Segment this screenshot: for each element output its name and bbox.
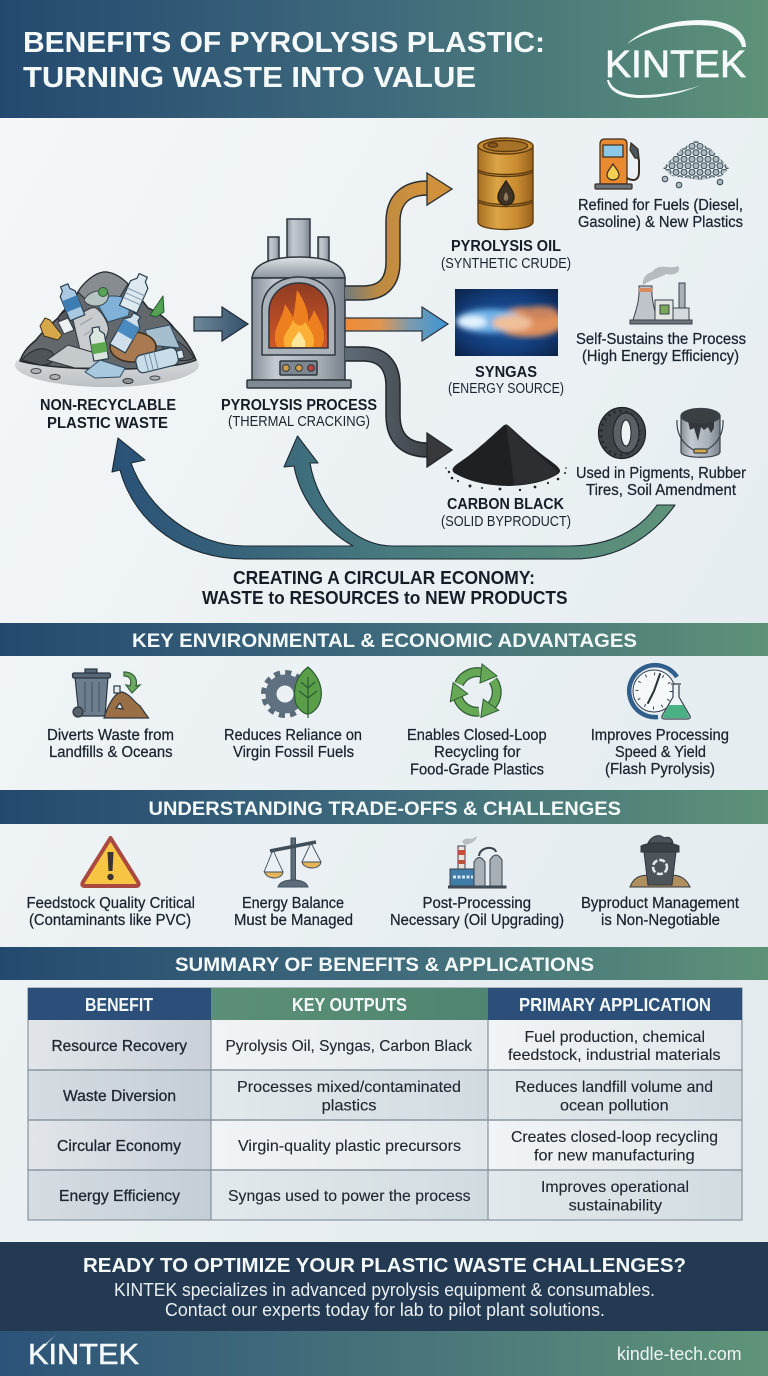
logo: KINTEK: KINTEK: [605, 44, 746, 86]
title: TURNING WASTE INTO VALUE: [23, 62, 476, 94]
table row: waste diversion: Reduces landfill volume and: [515, 1079, 713, 1096]
table row: waste diversion: Processes mixed/contaminated: [237, 1079, 461, 1096]
title: BENEFITS OF PYROLYSIS PLASTIC:: [23, 27, 545, 59]
table row: waste diversion: plastics: [322, 1098, 376, 1114]
label: syngas: SYNGAS: [475, 364, 537, 381]
text: closed-loop recycling: [407, 727, 547, 778]
table row: circular economy: Circular Economy: [57, 1138, 181, 1155]
footer band: [0, 1331, 768, 1376]
icon: tire: [598, 408, 646, 458]
footer url: kindle-tech.com: [617, 1344, 742, 1364]
arrow: circular return loop: [112, 436, 675, 559]
icon: clock and flask: [629, 665, 690, 719]
text: syngas application: Self-Sustains the Process: [576, 331, 746, 348]
text: post-processing: [390, 895, 564, 929]
label: pyrolysis oil: (SYNTHETIC CRUDE): [441, 255, 571, 272]
table row: resource recovery: Pyrolysis Oil, Syngas, Carbon Black: [226, 1038, 473, 1055]
heading band: trade-offs: [0, 790, 768, 824]
text: oil applications: Refined for Fuels (Diesel,: [578, 197, 743, 214]
header band: [0, 0, 768, 118]
table row: energy efficiency: sustainability: [569, 1198, 662, 1214]
arrow: to carbon black: [345, 354, 452, 467]
text: diverts waste: Landfills & Oceans: [49, 744, 173, 761]
text: reduces reliance: [224, 727, 362, 761]
logo: KINTEK: [605, 20, 746, 98]
label: carbon black: [441, 496, 571, 530]
arrow: to pyrolysis oil: [345, 173, 452, 293]
image: syngas flame: [455, 289, 564, 356]
text: feedstock quality: Feedstock Quality Critical: [26, 895, 195, 912]
table row: circular economy: for new manufacturing: [534, 1148, 695, 1164]
icon: warning triangle: [82, 838, 139, 886]
text: energy balance: Must be Managed: [234, 912, 353, 929]
call to action panel: Contact our experts today for lab to pilot plant solutions.: [165, 1300, 605, 1320]
label: pyrolysis process: (THERMAL CRACKING): [228, 413, 370, 430]
table row: energy efficiency: Energy Efficiency: [59, 1188, 180, 1205]
text: processing speed: [591, 727, 729, 778]
text: reduces reliance: Virgin Fossil Fuels: [233, 744, 354, 761]
label: pyrolysis oil: [441, 238, 571, 272]
text: processing speed: Speed & Yield: [615, 744, 706, 761]
text: diverts waste: [47, 727, 174, 761]
table row: circular economy: Creates closed-loop recycling: [511, 1129, 718, 1146]
text: carbon applications: [576, 465, 746, 499]
text: byproduct management: Byproduct Management: [581, 895, 740, 912]
table row: circular economy: Virgin-quality plastic precursors: [238, 1138, 461, 1155]
heading: creating a circular economy: WASTE to RESOURCES to NEW PRODUCTS: [202, 588, 568, 608]
text: energy balance: Energy Balance: [242, 895, 344, 912]
table row: circular economy: [57, 1129, 718, 1164]
text: feedstock quality: [26, 895, 195, 929]
text: processing speed: Improves Processing: [591, 727, 729, 744]
icon: byproduct bin: [630, 836, 690, 887]
heading band: key advantages: KEY ENVIRONMENTAL & ECONOMIC ADVANTAGES: [132, 631, 637, 652]
call to action panel: KINTEK specializes in advanced pyrolysis equipment & consumables.: [114, 1280, 655, 1300]
icon: refinery: [448, 836, 506, 888]
label: non-recyclable plastic waste: NON-RECYCLABLE: [40, 397, 176, 414]
icon: recycling arrows: [443, 664, 510, 723]
heading band: key advantages: [0, 623, 768, 656]
footer logo: KINTEK: [28, 1339, 140, 1371]
label: pyrolysis oil: PYROLYSIS OIL: [451, 238, 561, 255]
text: closed-loop recycling: Enables Closed-Loop: [407, 727, 547, 744]
text: syngas application: (High Energy Efficiency): [582, 348, 739, 365]
table row: energy efficiency: Improves operational: [541, 1179, 689, 1196]
panel: challenges: [26, 836, 740, 929]
text: carbon applications: Used in Pigments, Rubber: [576, 465, 746, 482]
label: pyrolysis process: PYROLYSIS PROCESS: [221, 397, 377, 414]
summary table: [28, 988, 742, 1220]
text: energy balance: [234, 895, 353, 929]
text: closed-loop recycling: Recycling for: [434, 744, 521, 761]
table header row: KEY OUTPUTS: [292, 995, 407, 1015]
icon: plastic pellets: [662, 140, 729, 188]
call to action panel: READY TO OPTIMIZE YOUR PLASTIC WASTE CHALLENGES?: [83, 1255, 686, 1277]
text: byproduct management: is Non-Negotiable: [601, 912, 720, 929]
table row: energy efficiency: [59, 1179, 689, 1214]
icon: paint bucket: [677, 408, 723, 457]
heading: creating a circular economy: CREATING A CIRCULAR ECONOMY:: [233, 568, 535, 588]
label: syngas: (ENERGY SOURCE): [448, 380, 564, 397]
text: oil applications: Gasoline) & New Plastics: [578, 214, 743, 231]
panel: pyrolysis process flow: [15, 138, 746, 608]
table row: resource recovery: Resource Recovery: [52, 1038, 187, 1055]
text: reduces reliance: Reduces Reliance on: [224, 727, 362, 744]
label: non-recyclable plastic waste: PLASTIC WASTE: [47, 415, 168, 432]
text: syngas application: [576, 331, 746, 365]
table row: resource recovery: feedstock, industrial materials: [508, 1047, 721, 1064]
arrow: waste to furnace: [194, 307, 248, 341]
text: post-processing: Post-Processing: [422, 895, 531, 912]
heading band: trade-offs: UNDERSTANDING TRADE-OFFS & CHALLENGES: [148, 799, 621, 820]
table row: energy efficiency: Syngas used to power the process: [228, 1188, 471, 1205]
table row: resource recovery: [52, 1029, 721, 1064]
heading band: summary: SUMMARY OF BENEFITS & APPLICATIONS: [175, 955, 594, 976]
table header row: [28, 988, 742, 1020]
table row: waste diversion: [63, 1079, 713, 1114]
text: processing speed: (Flash Pyrolysis): [605, 761, 715, 778]
icon: plastic waste heap: [15, 272, 199, 387]
text: byproduct management: [581, 895, 740, 929]
table row: resource recovery: Fuel production, chemical: [524, 1029, 705, 1046]
call to action panel: [0, 1242, 768, 1331]
text: feedstock quality: (Contaminants like PVC): [29, 912, 191, 929]
icon: trash bin and landfill: [72, 669, 148, 718]
text: post-processing: Necessary (Oil Upgrading): [390, 912, 564, 929]
icon: balance scale: [264, 838, 321, 887]
icon: pyrolysis furnace: [247, 219, 351, 388]
table row: waste diversion: ocean pollution: [560, 1098, 669, 1114]
arrow: to syngas: [345, 307, 448, 341]
heading band: summary: [0, 947, 768, 980]
table row: waste diversion: Waste Diversion: [63, 1088, 176, 1105]
icon: carbon black pile: [445, 424, 567, 491]
label: syngas: [448, 364, 564, 397]
label: non-recyclable plastic waste: [40, 397, 176, 432]
text: carbon applications: Tires, Soil Amendment: [586, 482, 737, 499]
text: oil applications: [578, 197, 743, 231]
text: diverts waste: Diverts Waste from: [47, 727, 174, 744]
icon: power plant: [630, 266, 692, 324]
label: carbon black: (SOLID BYPRODUCT): [441, 513, 571, 530]
label: pyrolysis process: [221, 397, 377, 430]
table header row: BENEFIT: [85, 995, 153, 1015]
heading: creating a circular economy: [202, 568, 568, 608]
text: closed-loop recycling: Food-Grade Plastics: [410, 762, 544, 778]
title: [23, 27, 545, 94]
icon: fuel pump: [595, 139, 639, 189]
label: carbon black: CARBON BLACK: [447, 496, 564, 513]
icon: oil barrel: [478, 138, 533, 230]
icon: gear and leaf: [264, 667, 321, 718]
panel: advantages: [47, 664, 729, 778]
table header row: PRIMARY APPLICATION: [519, 995, 711, 1015]
